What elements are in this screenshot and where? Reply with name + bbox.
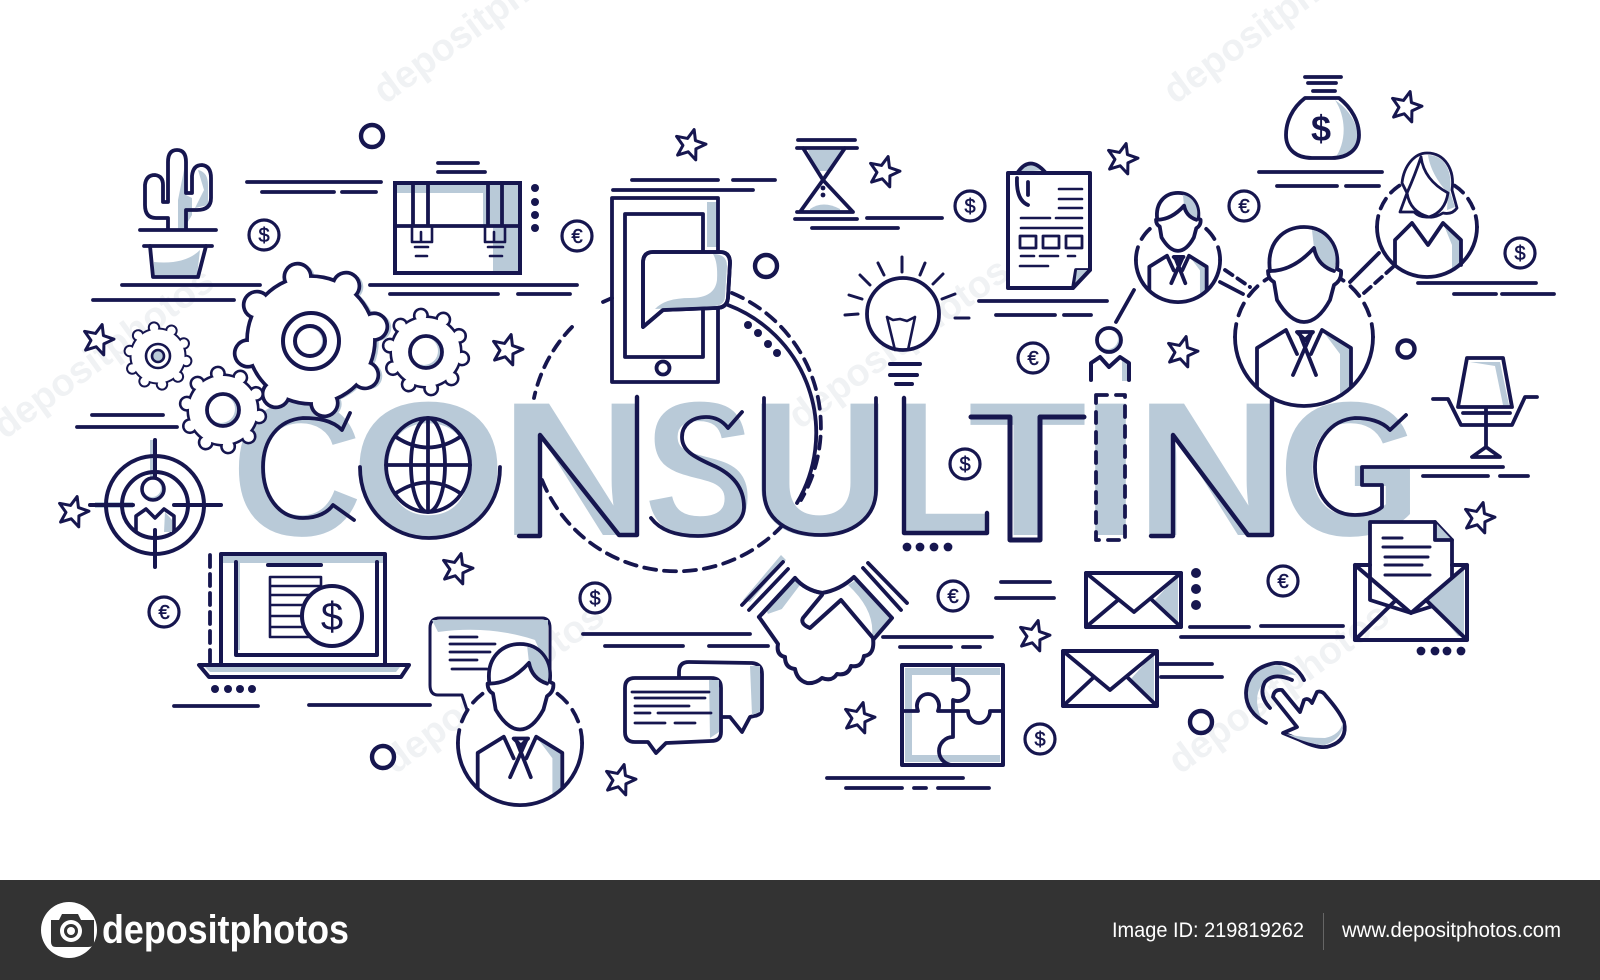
icon: right gear: [377, 305, 475, 399]
lines: [247, 182, 381, 192]
title: CONSULTING: I: [1081, 363, 1140, 576]
icon: envelope lower: [1063, 651, 1222, 706]
icon: small gear left: [120, 319, 196, 393]
dollar coins: $: [964, 196, 976, 218]
title: CONSULTING: U: [750, 363, 890, 576]
dollar coins: $: [1514, 243, 1526, 265]
lines: [1418, 283, 1554, 294]
dollar coins: $: [1034, 729, 1046, 751]
icon: lower gear: [174, 363, 272, 457]
euro coins: €: [571, 226, 583, 248]
dashed consulting ring: [534, 293, 821, 571]
image id: Image ID: 219819262: [1112, 919, 1304, 942]
euro coins: €: [158, 602, 170, 624]
title: CONSULTING: O: [351, 363, 506, 576]
website: www.depositphotos.com: [1341, 919, 1561, 942]
icon: smartphone with speech bubble: [603, 180, 775, 382]
title: CONSULTING: C: [232, 363, 362, 576]
stars: [55, 88, 1498, 796]
icon: briefcase: [370, 163, 577, 294]
icon: pair of chat bubbles: [583, 634, 768, 753]
icon: bottom person: [458, 644, 582, 805]
title: CONSULTING: N: [500, 363, 653, 576]
dollar coins: $: [258, 225, 270, 247]
euro coins: €: [1027, 348, 1039, 370]
icon: cactus in pot: [93, 150, 260, 300]
rings: [361, 125, 1414, 768]
icon: puzzle: [827, 637, 1003, 788]
icon: person on left of network: [1136, 193, 1220, 302]
watermark: depositphotos: [376, 594, 612, 782]
icon: target with person: [90, 440, 221, 567]
watermark: depositphotos: [1161, 594, 1397, 782]
icon: speech bubble behind person: [430, 618, 550, 713]
watermark: [0, 0, 1397, 782]
icon: laptop with money: $: [321, 595, 343, 639]
title letter outlines: [263, 395, 1503, 540]
euro coins: €: [1277, 571, 1289, 593]
title: CONSULTING: N: [1135, 363, 1288, 576]
dollar coins: [249, 191, 1535, 754]
title: CONSULTING: G: [1278, 363, 1421, 576]
euro coins: [149, 191, 1298, 627]
icon: hand tapping: [1245, 663, 1345, 747]
icon: hourglass: [795, 140, 942, 228]
logo camera: [41, 902, 97, 958]
title: CONSULTING: T: [968, 363, 1087, 576]
euro coins: €: [947, 586, 959, 608]
watermark: depositphotos: [781, 249, 1017, 437]
lines: [77, 415, 177, 427]
icon: large gear: [206, 235, 420, 446]
icon: money bag: [1259, 77, 1382, 186]
euro coins: €: [1238, 196, 1250, 218]
logo wordmark: depositphotos: [102, 908, 349, 952]
footer bar: [0, 880, 1600, 980]
connectors between people: [1116, 253, 1393, 322]
icon: handshake: [742, 555, 907, 683]
icon: money bag: $: [1311, 108, 1331, 149]
dollar coins: $: [589, 588, 601, 610]
icon: light bulb: [845, 257, 969, 384]
icon: woman: [1377, 153, 1477, 277]
icon: envelope upper: [996, 568, 1343, 637]
dollar coins: $: [959, 454, 971, 476]
title: CONSULTING: L: [892, 363, 990, 576]
icon: globe: [386, 418, 470, 512]
icon: document: [979, 162, 1107, 315]
title: CONSULTING: S: [645, 363, 754, 576]
icon: small person on I: [1091, 328, 1130, 381]
icon: laptop with money: [174, 554, 430, 706]
icon: open envelope with letter: [1355, 522, 1467, 655]
icon: office chair: [1423, 358, 1537, 476]
icon: central person: [1235, 227, 1373, 406]
dots under L: [903, 543, 952, 551]
